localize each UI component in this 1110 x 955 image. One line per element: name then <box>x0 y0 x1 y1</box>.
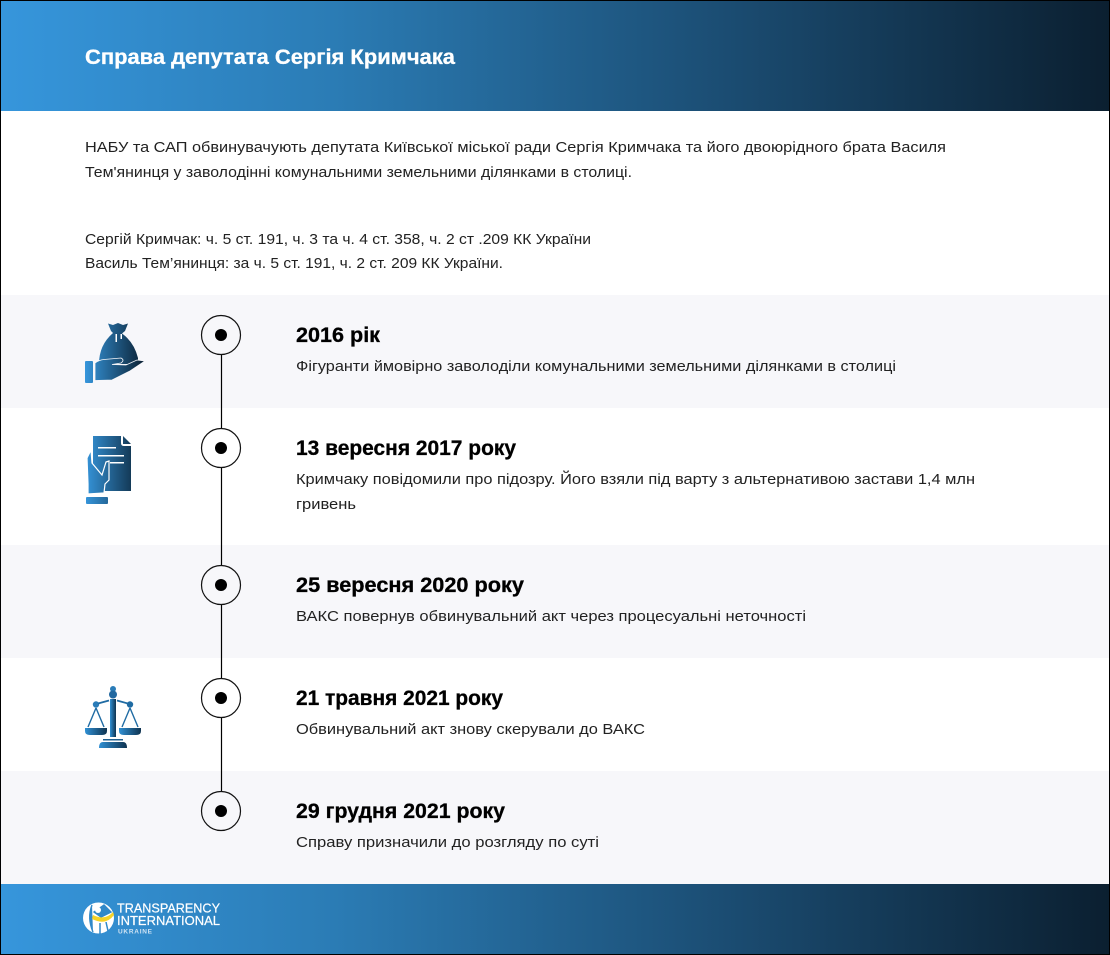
event: 2016: Фігуранти ймовірно заволоділи комунальними земельними ділянками в столиці <box>296 358 896 375</box>
event: 25 September 2020 <box>296 574 806 625</box>
timeline marker 2017 <box>202 428 240 468</box>
logo: Transparency International Ukraine: TRANSPARENCY <box>117 902 221 916</box>
event: 13 September 2017 <box>296 437 975 513</box>
logo: Transparency International Ukraine: INTERNATIONAL <box>117 914 220 928</box>
icon: scales of justice <box>85 686 141 748</box>
timeline axis <box>220 335 222 811</box>
event: 29 December 2021: Справу призначили до розгляду по суті <box>296 834 599 851</box>
event: 25 September 2020: 25 вересня 2020 року <box>296 574 524 597</box>
event: 21 May 2021: 21 травня 2021 року <box>296 687 503 710</box>
event: 13 September 2017: гривень <box>296 496 356 513</box>
event: 21 May 2021 <box>296 687 645 738</box>
timeline marker May 2021 <box>202 678 240 718</box>
event: 2016 <box>296 324 896 375</box>
event: 21 May 2021: Обвинувальний акт знову скерували до ВАКС <box>296 721 645 738</box>
event: 25 September 2020: ВАКС повернув обвинувальний акт через процесуальні неточності <box>296 608 806 625</box>
header banner <box>0 0 1110 111</box>
icon: hand holding document <box>86 436 131 504</box>
charges text <box>85 231 591 272</box>
event: 13 September 2017: 13 вересня 2017 року <box>296 437 516 460</box>
event: 29 December 2021: 29 грудня 2021 року <box>296 800 505 823</box>
timeline marker 2020 <box>202 566 240 604</box>
charges text: Василь Тем’янинця: за ч. 5 ст. 191, ч. 2 ст. 209 КК України. <box>85 255 503 272</box>
row background: 2016 <box>0 295 1110 408</box>
row background: December 2021 <box>0 771 1110 884</box>
event: 29 December 2021 <box>296 800 599 851</box>
logo: Transparency International Ukraine <box>83 902 221 936</box>
title: Справа депутата Сергія Кримчака <box>85 46 455 69</box>
charges text: Сергій Кримчак: ч. 5 ст. 191, ч. 3 та ч. 4 ст. 358, ч. 2 ст .209 КК України <box>85 231 591 248</box>
timeline marker December 2021 <box>202 792 240 830</box>
event: 2016: 2016 рік <box>296 324 380 347</box>
intro text: НАБУ та САП обвинувачують депутата Київської міської ради Сергія Кримчака та його двоюрідного брата Василя <box>85 139 946 156</box>
event: 13 September 2017: Кримчаку повідомили про підозру. Його взяли під варту з альтернативою застави 1,4 млн <box>296 470 975 488</box>
timeline marker 2016 <box>202 316 240 354</box>
row background: 2020 <box>0 545 1110 658</box>
icon: hand holding money bag <box>85 323 145 383</box>
intro text <box>85 139 946 181</box>
logo: Transparency International Ukraine: UKRAINE <box>118 928 153 936</box>
footer banner <box>0 884 1110 955</box>
intro text: Тем'янинця у заволодінні комунальними земельними ділянками в столиці. <box>85 164 632 181</box>
